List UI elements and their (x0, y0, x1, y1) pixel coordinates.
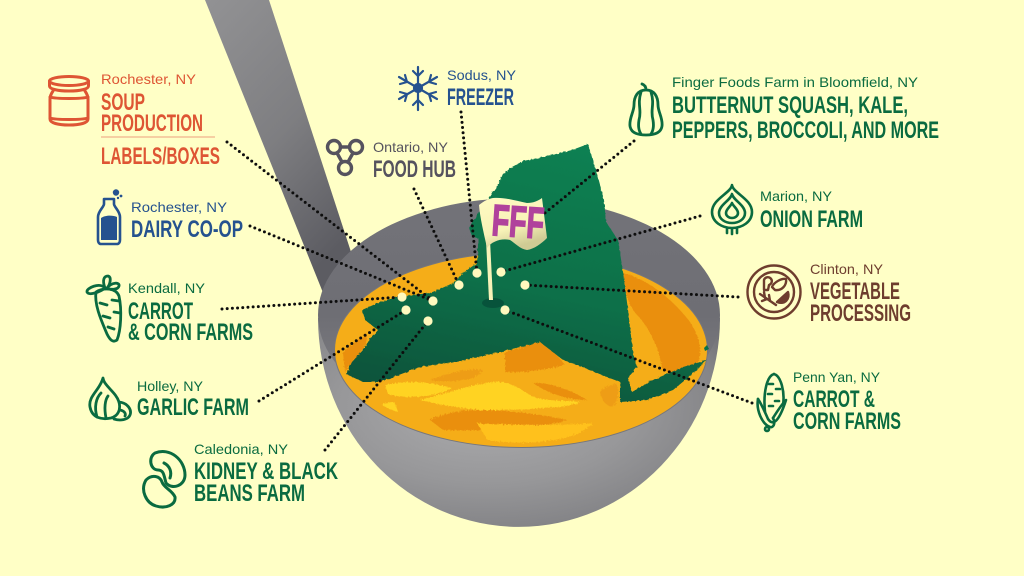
icon: snowflake (399, 67, 437, 110)
icon: garlic (90, 378, 131, 420)
heading: PRODUCTION (101, 110, 203, 137)
dotted connector lines (222, 112, 752, 450)
callout: clinton vegetable processing (748, 261, 911, 327)
callout: soup production (50, 71, 220, 170)
icon: milk bottle (98, 189, 122, 244)
location: Caledonia, NY (194, 441, 289, 457)
heading: DAIRY CO-OP (131, 216, 243, 243)
location: Ontario, NY (373, 139, 449, 155)
callout: dairy co-op (98, 189, 243, 244)
heading: PROCESSING (810, 300, 911, 327)
heading: CARROT & (793, 386, 875, 413)
icon: beans (144, 452, 185, 507)
heading: BUTTERNUT SQUASH, KALE, (672, 92, 908, 119)
callout: kendall carrot and corn (87, 276, 253, 346)
icon: vegetable plate (748, 266, 800, 318)
heading: VEGETABLE (810, 278, 900, 305)
icon: onion (712, 185, 752, 234)
location: Marion, NY (760, 188, 833, 204)
heading: & CORN FARMS (128, 319, 253, 346)
divider (101, 136, 215, 138)
callout: ontario food hub (328, 139, 456, 183)
callout: caledonia beans (144, 441, 338, 507)
New York state shape (346, 144, 709, 402)
ladle handle (205, 0, 352, 310)
ladle bowl body (318, 318, 720, 527)
callout: holley garlic (90, 378, 249, 421)
callout: sodus freezer (399, 67, 517, 111)
heading: SOUP (101, 89, 145, 116)
location: Sodus, NY (447, 67, 517, 83)
location: Kendall, NY (128, 280, 206, 296)
location: Clinton, NY (810, 261, 884, 277)
heading: FOOD HUB (373, 156, 456, 183)
location: Penn Yan, NY (793, 369, 881, 385)
location: Holley, NY (137, 378, 204, 394)
ladle (205, 0, 720, 527)
ladle inner wall (318, 198, 720, 432)
icon: carrot (87, 276, 121, 341)
heading: CARROT (128, 298, 193, 325)
callout: finger foods farm (630, 74, 939, 144)
heading: GARLIC FARM (137, 394, 249, 421)
icon: jar (50, 76, 88, 125)
flag pole (486, 240, 493, 300)
location: Finger Foods Farm in Bloomfield, NY (672, 74, 919, 90)
flag cloth (479, 198, 547, 250)
icon: corn (758, 374, 786, 431)
heading: CORN FARMS (793, 408, 901, 435)
flag letters: FFF (490, 196, 546, 249)
heading: KIDNEY & BLACK (194, 458, 338, 485)
callout: penn yan carrot and corn (758, 369, 901, 435)
heading: LABELS/BOXES (101, 143, 220, 170)
location: Rochester, NY (101, 71, 197, 87)
callout: marion onion (712, 185, 863, 234)
heading: ONION FARM (760, 206, 863, 233)
heading: BEANS FARM (194, 480, 305, 507)
icon: butternut squash (630, 84, 662, 135)
icon: hub network (328, 140, 362, 174)
soup (334, 252, 708, 448)
location dots (397, 267, 530, 326)
heading: FREEZER (447, 84, 514, 111)
location: Rochester, NY (131, 199, 228, 215)
FFF flag (479, 196, 547, 300)
